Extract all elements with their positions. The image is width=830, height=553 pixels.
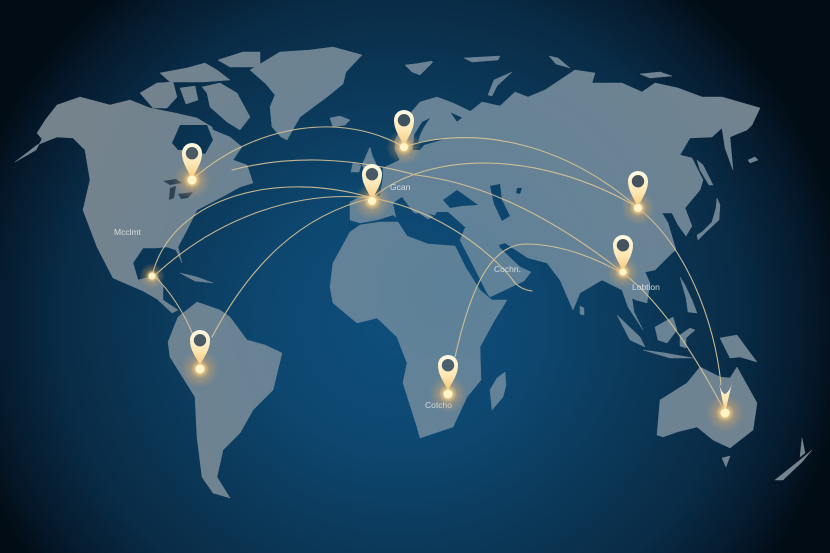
Baltic and Bothnia — [413, 118, 445, 150]
label: west: Mcclmt — [114, 227, 142, 237]
marker: Northern Europe — [386, 110, 422, 165]
landmasses — [15, 47, 760, 330]
arc: Southern Africa to Bangkok — [455, 244, 622, 357]
Ireland — [351, 163, 361, 172]
Java — [643, 350, 693, 358]
Mediterranean — [393, 197, 466, 246]
New Zealand — [775, 450, 812, 480]
Novaya Zemlya — [488, 72, 512, 96]
marker: South America — [181, 330, 219, 388]
Madagascar — [490, 372, 506, 410]
inland seas — [172, 118, 522, 246]
Canadian arctic islands — [140, 52, 260, 130]
southern landmasses — [168, 193, 812, 498]
Sumatra — [617, 315, 645, 347]
arc: Mexico to Spain upper — [153, 187, 372, 272]
Philippines — [680, 277, 697, 313]
New Guinea — [720, 335, 757, 362]
Italy and Greece — [403, 193, 433, 219]
arc: North America to Europe — [232, 160, 416, 175]
Aral Sea — [516, 188, 522, 194]
city labels — [114, 182, 660, 410]
marker: East Asia — [621, 171, 655, 225]
arc: Mexico to Spain lower — [154, 197, 372, 276]
Caribbean islands — [180, 273, 213, 283]
Borneo — [655, 317, 677, 343]
South America — [168, 302, 282, 498]
Britain — [362, 147, 378, 172]
arc: Toronto to Northern Europe — [192, 127, 404, 180]
Black Sea — [443, 190, 478, 208]
arc: Spain to East Asia — [372, 163, 637, 207]
arc: Northern Europe to East Asia — [404, 138, 637, 207]
marker: Mexico — [139, 263, 165, 289]
Greenland — [250, 47, 362, 140]
location markers — [139, 110, 744, 432]
marker: Southern Africa — [429, 355, 467, 413]
arc: South America to Spain — [212, 198, 372, 337]
marker: Toronto — [173, 143, 211, 199]
North America — [15, 97, 253, 313]
Africa — [330, 222, 507, 438]
arc: Europe to Bangkok — [416, 175, 622, 272]
Iceland — [330, 116, 350, 127]
label: Arabia: Cochn. — [494, 264, 521, 274]
network arcs — [153, 127, 723, 408]
marker: Spain — [353, 164, 391, 220]
Europe and Asia — [350, 70, 760, 330]
Caspian Sea — [490, 184, 510, 221]
arc: Mexico to South America — [154, 276, 193, 335]
Great Lakes — [163, 179, 193, 200]
Sri Lanka — [580, 306, 584, 315]
arc: Spain to Arabia — [372, 198, 532, 291]
Kuril island — [748, 157, 758, 163]
Hudson Bay — [172, 125, 213, 154]
Australia — [657, 367, 757, 448]
Arctic Russia islands — [405, 56, 672, 78]
Arabia — [460, 228, 531, 297]
arc: East Asia to Australia — [638, 208, 721, 385]
Sulawesi — [680, 328, 695, 348]
Japan — [697, 198, 720, 240]
Tasmania — [722, 456, 730, 467]
label: Europe: Gcan — [390, 182, 411, 192]
label: Southeast Asia: Lobtion — [632, 282, 660, 292]
label: Southern Africa: Cotcho — [425, 400, 452, 410]
marker: Southeast Asia — [607, 235, 639, 288]
marker: Australia — [706, 383, 744, 432]
Sakhalin — [697, 160, 713, 185]
arc: Bangkok to Australia — [623, 273, 723, 408]
